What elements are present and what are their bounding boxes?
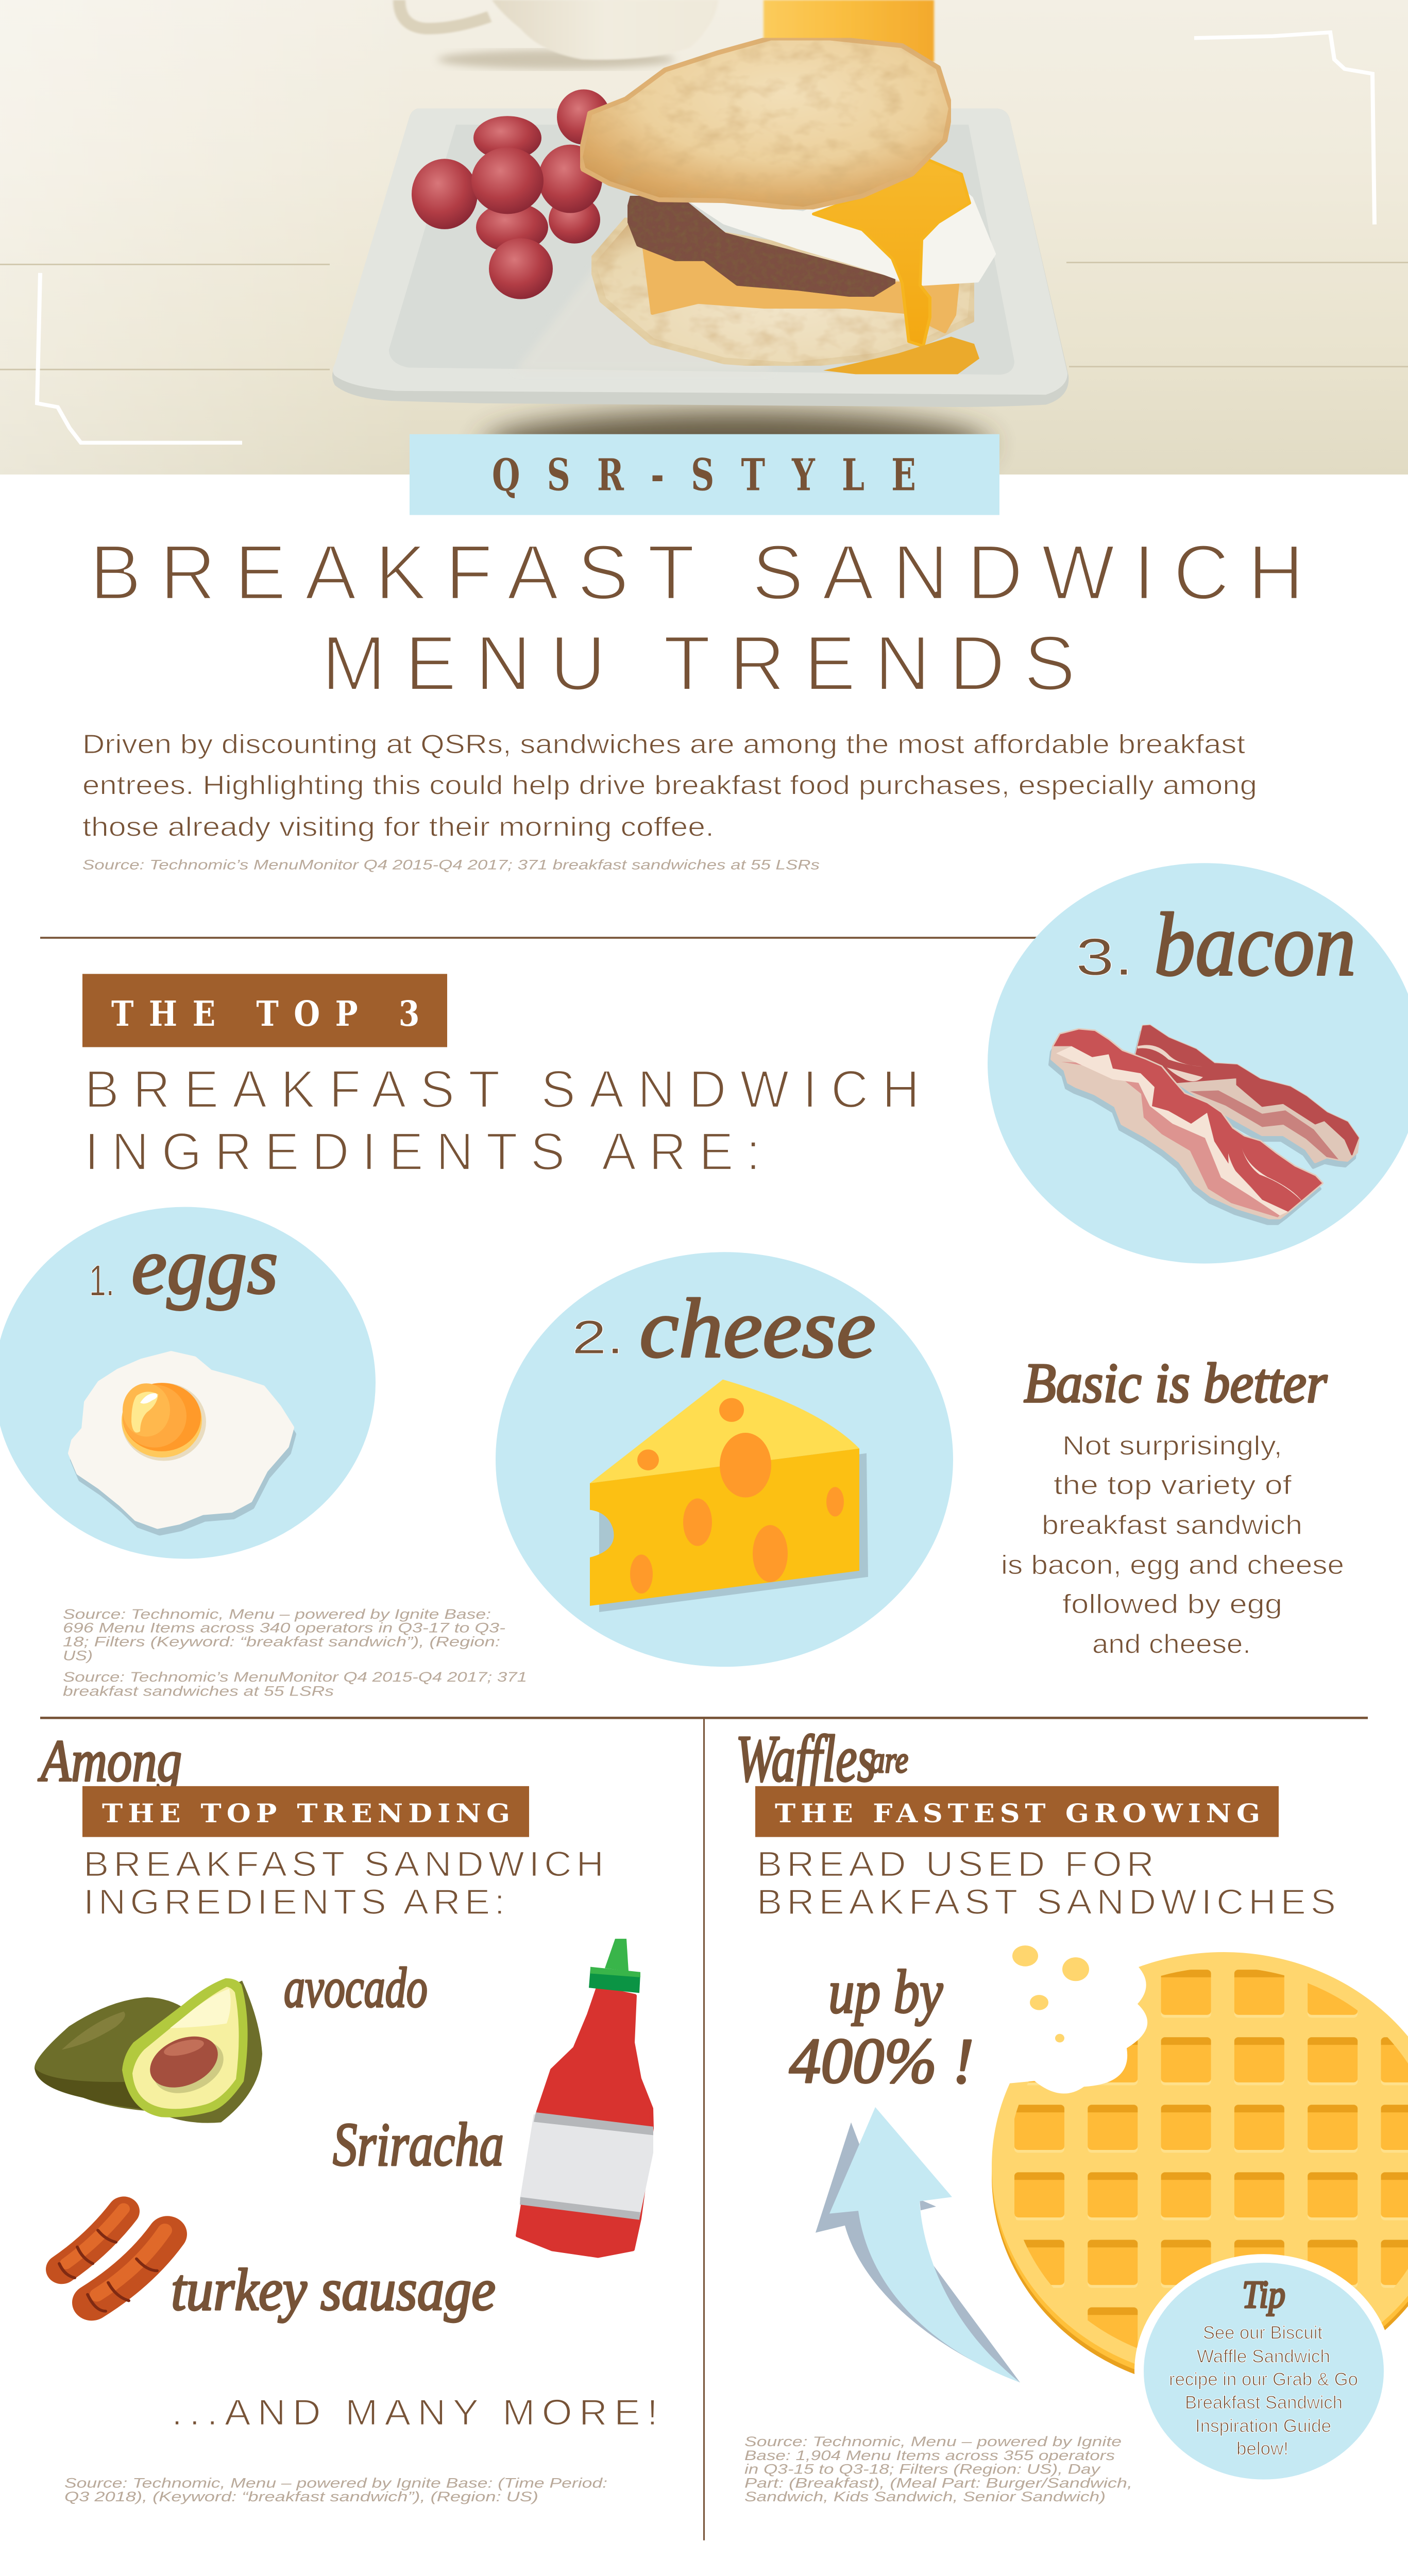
heading: trending ingredients: INGREDIENTS ARE: (83, 1883, 505, 1922)
top biscuit (580, 38, 951, 209)
source note: trending: Source: Technomic, Menu – powered by Ignite Base: (Time Period: (64, 2475, 607, 2490)
label box: QSR-STYLE (410, 434, 999, 515)
source note: top 3: breakfast sandwiches at 55 LSRs (63, 1684, 334, 1699)
heading: breakfast sandwich ingredients are (84, 1060, 920, 1181)
text: up by 400%: up by (828, 1958, 943, 2026)
heading: breakfast sandwich ingredients are: BREAKFAST SANDWICH (84, 1060, 920, 1119)
source note: waffles (744, 2434, 1132, 2504)
icon: waffle with bite (969, 1926, 1408, 2391)
white corner marks (37, 32, 1375, 443)
callout: tip: Tip (1242, 2273, 1285, 2316)
callout: tip: See our Biscuit (1203, 2323, 1322, 2343)
badge: the top trending: THE TOP TRENDING (102, 1799, 510, 1828)
callout: basic is better: is bacon, egg and cheese (1001, 1550, 1344, 1580)
plate (332, 108, 1068, 407)
intro paragraph (82, 730, 1257, 842)
title (90, 529, 1304, 707)
icon: bacon strips (1050, 1026, 1358, 1224)
source note: top 3: US) (63, 1648, 93, 1663)
source note: trending: Q3 2018), (Keyword: “breakfast sandwich”), (Region: US) (64, 2489, 538, 2504)
text: and many more: ...AND MANY MORE! (172, 2393, 658, 2433)
source note: top 3: Source: Technomic’s MenuMonitor Q4 2015-Q4 2017; 371 (63, 1669, 527, 1685)
label: 1. eggs: 1. (89, 1256, 114, 1305)
heading: bread used: BREAD USED FOR (757, 1845, 1154, 1884)
label: 3. bacon: 3. (1076, 928, 1133, 986)
text: up by 400%: 400% ! (789, 2026, 974, 2097)
source note: waffles: Part: (Breakfast), (Meal Part: Burger/Sandwich, (744, 2475, 1132, 2490)
callout: tip (1134, 2254, 1393, 2488)
sausage patty (627, 196, 895, 297)
intro paragraph: those already visiting for their morning coffee. (82, 812, 714, 842)
label: sriracha: Sriracha (333, 2111, 504, 2179)
callout: tip: Breakfast Sandwich (1185, 2392, 1343, 2413)
script: waffles are: are (870, 1740, 908, 1781)
callout: tip: below! (1236, 2438, 1288, 2459)
fried egg (690, 194, 996, 286)
callout: basic is better: followed by egg (1062, 1589, 1282, 1619)
text: up by 400% (789, 1958, 974, 2097)
orange juice glass (764, 0, 934, 62)
heading: bread used: BREAKFAST SANDWICHES (757, 1883, 1336, 1922)
label: 3. bacon (1076, 894, 1356, 995)
source note: intro: Source: Technomic’s MenuMonitor Q4 2015-Q4 2017; 371 breakfast sandwiches at 55 LSRs (82, 857, 820, 872)
source note: waffles: in Q3-15 to Q3-18; Filters (Region: US), Day (744, 2462, 1101, 2477)
source note: top 3 (63, 1606, 527, 1699)
coffee mug (399, 0, 718, 60)
label: turkey sausage: turkey sausage (171, 2257, 496, 2323)
source note: waffles: Base: 1,904 Menu Items across 355 operators (744, 2448, 1115, 2463)
arrow: growth (816, 2107, 1020, 2382)
source note: top 3: Source: Technomic, Menu – powered by Ignite Base: (63, 1606, 491, 1622)
label: 2. cheese: cheese (639, 1282, 876, 1376)
icon: avocado (35, 1978, 262, 2123)
source note: waffles: Sandwich, Kids Sandwich, Senior Sandwich) (744, 2489, 1106, 2504)
panel: fastest growing bread (736, 1722, 1408, 2504)
label box: QSR-STYLE: QSR-STYLE (492, 449, 916, 501)
heading badge: THE TOP 3 (82, 974, 447, 1047)
callout: basic is better: and cheese. (1092, 1629, 1251, 1659)
label: 3. bacon: bacon (1154, 894, 1356, 995)
title: MENU TRENDS (321, 620, 1076, 707)
heading: trending ingredients: BREAKFAST SANDWICH (83, 1845, 604, 1884)
panel: bacon circle (988, 863, 1408, 1263)
icon: turkey sausages (59, 2209, 167, 2311)
source note: trending (64, 2475, 607, 2504)
source note: top 3: 18; Filters (Keyword: “breakfast sandwich”), (Region: (63, 1634, 500, 1649)
heading: trending ingredients (83, 1845, 604, 1922)
intro paragraph: entrees. Highlighting this could help drive breakfast food purchases, especially among (82, 770, 1257, 800)
panel: cheese circle (496, 1252, 953, 1667)
callout: basic is better: Not surprisingly, (1062, 1431, 1282, 1461)
icon: cheese wedge (590, 1380, 868, 1612)
egg yolk (813, 157, 970, 346)
callout: basic is better (1001, 1352, 1344, 1659)
callout: tip: recipe in our Grab & Go (1169, 2369, 1358, 2389)
lower biscuit (591, 218, 974, 366)
script: among: Among (38, 1728, 182, 1794)
script: waffles are: Waffles (736, 1722, 876, 1795)
heading: breakfast sandwich ingredients are: INGREDIENTS ARE: (84, 1122, 760, 1181)
badge: the top trending (82, 1786, 529, 1837)
heading: bread used (757, 1845, 1336, 1922)
icon: fried egg (71, 1353, 294, 1533)
label: avocado: avocado (284, 1956, 428, 2019)
label: 2. cheese: 2. (572, 1311, 624, 1364)
callout: tip: Waffle Sandwich (1197, 2346, 1330, 2366)
label: 1. eggs: eggs (131, 1222, 278, 1311)
callout: tip: Inspiration Guide (1195, 2416, 1331, 2436)
source note: top 3: 696 Menu Items across 340 operators in Q3-17 to Q3- (63, 1620, 505, 1635)
badge: the fastest growing: THE FASTEST GROWING (775, 1799, 1260, 1828)
yolk pool (823, 336, 979, 374)
callout: basic is better: Basic is better (1024, 1352, 1328, 1414)
callout: basic is better: breakfast sandwich (1042, 1511, 1302, 1540)
source note: waffles: Source: Technomic, Menu – powered by Ignite (744, 2434, 1122, 2449)
hero photo: breakfast sandwich on a plate (0, 0, 1408, 478)
badge: the fastest growing (755, 1786, 1279, 1837)
grapes (412, 90, 610, 299)
icon: sriracha bottle (518, 1939, 653, 2256)
title: BREAKFAST SANDWICH (90, 529, 1304, 616)
cheese slice (644, 248, 958, 332)
panel: top trending (35, 1728, 658, 2504)
heading badge: THE TOP 3: THE TOP 3 (111, 993, 419, 1034)
panel: eggs circle (0, 1207, 376, 1559)
intro paragraph: Driven by discounting at QSRs, sandwiches are among the most affordable breakfast (82, 730, 1245, 759)
callout: basic is better: the top variety of (1054, 1470, 1292, 1500)
